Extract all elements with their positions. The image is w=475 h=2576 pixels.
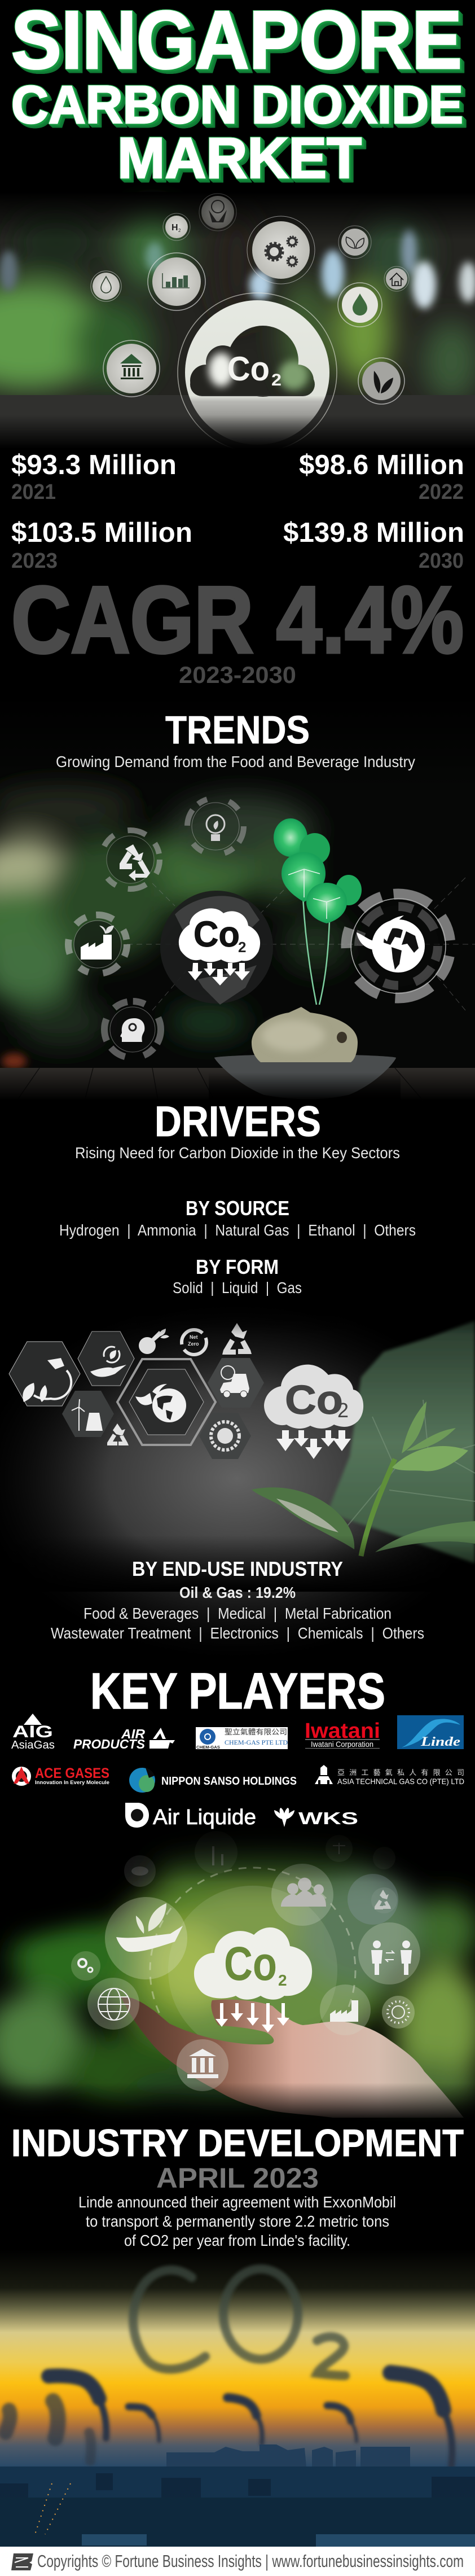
hexagon icon group [9,1323,264,1459]
circle icon: hand with leaf [105,1897,187,1979]
logo: Chem-Gas: CHEM-GAS PTE LTD [225,1738,288,1746]
logo: Air Products [73,1727,175,1751]
development description: Linde announced their agreement with ExxonMobil [78,2193,396,2211]
icon: globe ring [346,894,450,998]
title: MARKET [117,126,362,190]
logo: Air Liquide: Air Liquide [153,1806,256,1829]
stat 2023 [11,518,192,573]
segment: by end-use industry: Food & Beverages | Medical | Metal Fabrication [83,1605,392,1622]
dashed connector lines [127,878,475,1010]
logo: Air Liquide [125,1803,256,1829]
icon: H2: 2 [178,228,181,233]
stat 2021: 2021 [11,480,56,504]
logo: AsiaGas: AIG [12,1723,53,1741]
icon: net zero [182,1330,206,1355]
cloud CO2: Co [224,1937,277,1990]
heading: trends: Growing Demand from the Food and Beverage Industry [56,753,415,770]
title [11,0,463,190]
hexagon: electric car [208,1358,264,1408]
skyline photo: sunset with CO2 smoke [0,2249,475,2547]
heading: drivers: DRIVERS [155,1098,321,1146]
segment: by form: BY FORM [196,1255,279,1278]
hexagon: wind and solar [62,1391,114,1437]
footer [0,2547,475,2576]
heading: key players: KEY PLAYERS [90,1663,385,1720]
logo: Chem-Gas: CHEM-GAS [196,1746,220,1750]
icon: recycle ring [101,830,160,889]
logo: Fortune Business Insights [11,2553,33,2570]
icon: CO2 cloud with arrows: Co [285,1378,343,1423]
logo: AsiaGas: AsiaGas [11,1739,55,1751]
title: CARBON DIOXIDE [11,75,463,135]
hexagon: hand with leaf [78,1331,134,1386]
icon: green drop [338,283,382,327]
logo: Nippon Sanso Holdings: NIPPON SANSO HOLDINGS [161,1775,297,1788]
hexagon: central earth [117,1359,215,1445]
circle icon: sun [382,1996,415,2029]
icon: head with gears [104,1001,161,1058]
stone bulb [252,1007,358,1062]
logo: AsiaGas [11,1714,55,1751]
arrows down [215,2003,289,2032]
icon: CO2 cloud with arrows: 2 [238,939,246,956]
icon: bank building [103,340,160,397]
circle icon: globe [87,1978,139,2030]
icon: twin leaves [358,358,404,404]
logo: Ace Gases: Innovation In Every Molecule [35,1780,109,1786]
icon: leaves [338,226,371,259]
heading: drivers [75,1098,400,1162]
bowl [214,1054,396,1099]
logo: Asia Technical Gas [315,1765,464,1786]
icon: light bulb ring [187,798,244,855]
hand photo: CO2 cloud over open palm [0,1820,475,2156]
stat 2022 [299,450,464,504]
segment: by end-use industry: Wastewater Treatment | Electronics | Chemicals | Others [51,1624,424,1642]
icon: CO2 cloud with arrows [179,908,260,985]
stat 2022: 2022 [419,480,464,504]
segment: by source: Hydrogen | Ammonia | Natural Gas | Ethanol | Others [59,1221,416,1239]
segment: by form [173,1255,302,1296]
circle icon: people [271,1864,333,1926]
icon: factory ring [68,915,127,974]
heading: drivers: Rising Need for Carbon Dioxide in the Key Sectors [75,1144,400,1162]
icon: dark globe [160,891,273,1005]
logo: Air Products: AIR [121,1727,145,1741]
development description: to transport & permanently store 2.2 metric tons [86,2213,389,2230]
plant with leaves [274,818,362,1005]
sprout leaves and stem [252,1401,475,1556]
logo: Chem-Gas: 聖立氣體有限公司 [225,1728,287,1736]
hexagon: gear head [199,1413,251,1459]
icon: flask [139,1329,169,1354]
trends photo: plant with CO2 icons [0,694,475,1101]
icon: CO2 cloud with arrows [264,1365,363,1459]
icon: CO2 cloud with arrows: Co [193,914,240,954]
cloud CO2 [194,1927,312,2000]
large background leaf [327,1321,475,1563]
icon: net zero: Net [190,1334,198,1340]
logo: WKS [274,1808,358,1828]
logo: Linde [397,1715,464,1749]
cloud CO2: 2 [278,1972,287,1989]
icon: H2: H [171,223,178,233]
circle icon: gears [71,1951,100,1981]
hero photo: blurred forest with CO2 icons [0,192,475,453]
heading: trends [56,708,415,770]
circle icon: robot [373,1847,395,1869]
logo: Ace Gases [12,1765,109,1786]
logo: Linde: Linde [420,1734,460,1749]
segment: by end-use industry [51,1557,424,1642]
segment: by end-use industry: Oil & Gas : 19.2% [179,1584,296,1601]
circle icon: wind turbines [195,1831,238,1874]
circle icon: factory [320,1984,371,2035]
segment: by end-use industry: BY END-USE INDUSTRY [132,1557,343,1580]
logo: Ace Gases: ACE GASES [35,1765,109,1781]
segment: by source: BY SOURCE [186,1197,289,1220]
stat 2021 [11,450,177,504]
icon: water drop outline [91,271,121,301]
stat 2030: 2030 [419,549,464,573]
logo: Asia Technical Gas: ASIA TECHNICAL GAS CO (PTE) LTD [337,1777,464,1786]
icon: CO2 cloud with arrows: 2 [337,1399,349,1422]
icon: net zero: Zero [188,1341,199,1347]
big CO2 disc: 2 [271,371,282,389]
city skyline [0,2444,475,2547]
stat 2023: $103.5 Million [11,518,192,548]
stat 2023: 2023 [11,549,58,573]
circle icon: bank [177,2039,228,2091]
stat 2022: $98.6 Million [299,450,464,480]
development description: of CO2 per year from Linde's facility. [124,2232,350,2249]
date: April 2023: APRIL 2023 [156,2162,319,2194]
logo: Air Products: PRODUCTS [73,1737,146,1751]
big CO2 disc: Co [227,350,270,388]
heading: trends: TRENDS [165,708,310,752]
icon: gears [247,216,315,284]
CAGR headline: 2023-2030 [179,661,296,688]
ground strip [0,395,475,452]
icon: house [384,266,409,291]
stat 2030 [283,518,464,573]
circle icon: recycle [348,1874,398,1925]
segment: by form: Solid | Liquid | Gas [173,1279,302,1296]
segment: by source [59,1197,416,1239]
open hand [121,1997,464,2118]
logo: Chem-Gas [196,1727,288,1750]
stat 2030: $139.8 Million [283,518,464,548]
logo: WKS: WKS [298,1808,358,1828]
logo: Nippon Sanso Holdings [129,1768,297,1793]
main circle [168,1886,337,2055]
smoke CO2 letters [133,2269,345,2376]
circle icon: coins [124,1855,156,1887]
development description [78,2193,396,2249]
smoke plumes [6,2373,452,2467]
stat 2021: $93.3 Million [11,450,177,480]
market value stats [11,450,464,573]
circle icon: exchange people [358,1922,420,1984]
logo: Iwatani: Iwatani [305,1719,380,1743]
logo: Asia Technical Gas: 亞洲工藝氣私人有限公司 [337,1768,464,1777]
icon: globe in hands [199,194,236,231]
hexagon: plug [9,1342,80,1406]
icon: recycle [222,1323,252,1355]
circle icon: scales [326,1835,353,1862]
sustainability photo: hexagon icons and leaf [0,1296,475,1659]
table [0,1068,475,1101]
big CO2 disc [178,293,337,452]
icon: H2 [163,213,190,240]
logo: Iwatani: Iwatani Corporation [311,1740,373,1749]
icon: bar chart [148,253,205,310]
icon: small recycle [107,1423,129,1445]
